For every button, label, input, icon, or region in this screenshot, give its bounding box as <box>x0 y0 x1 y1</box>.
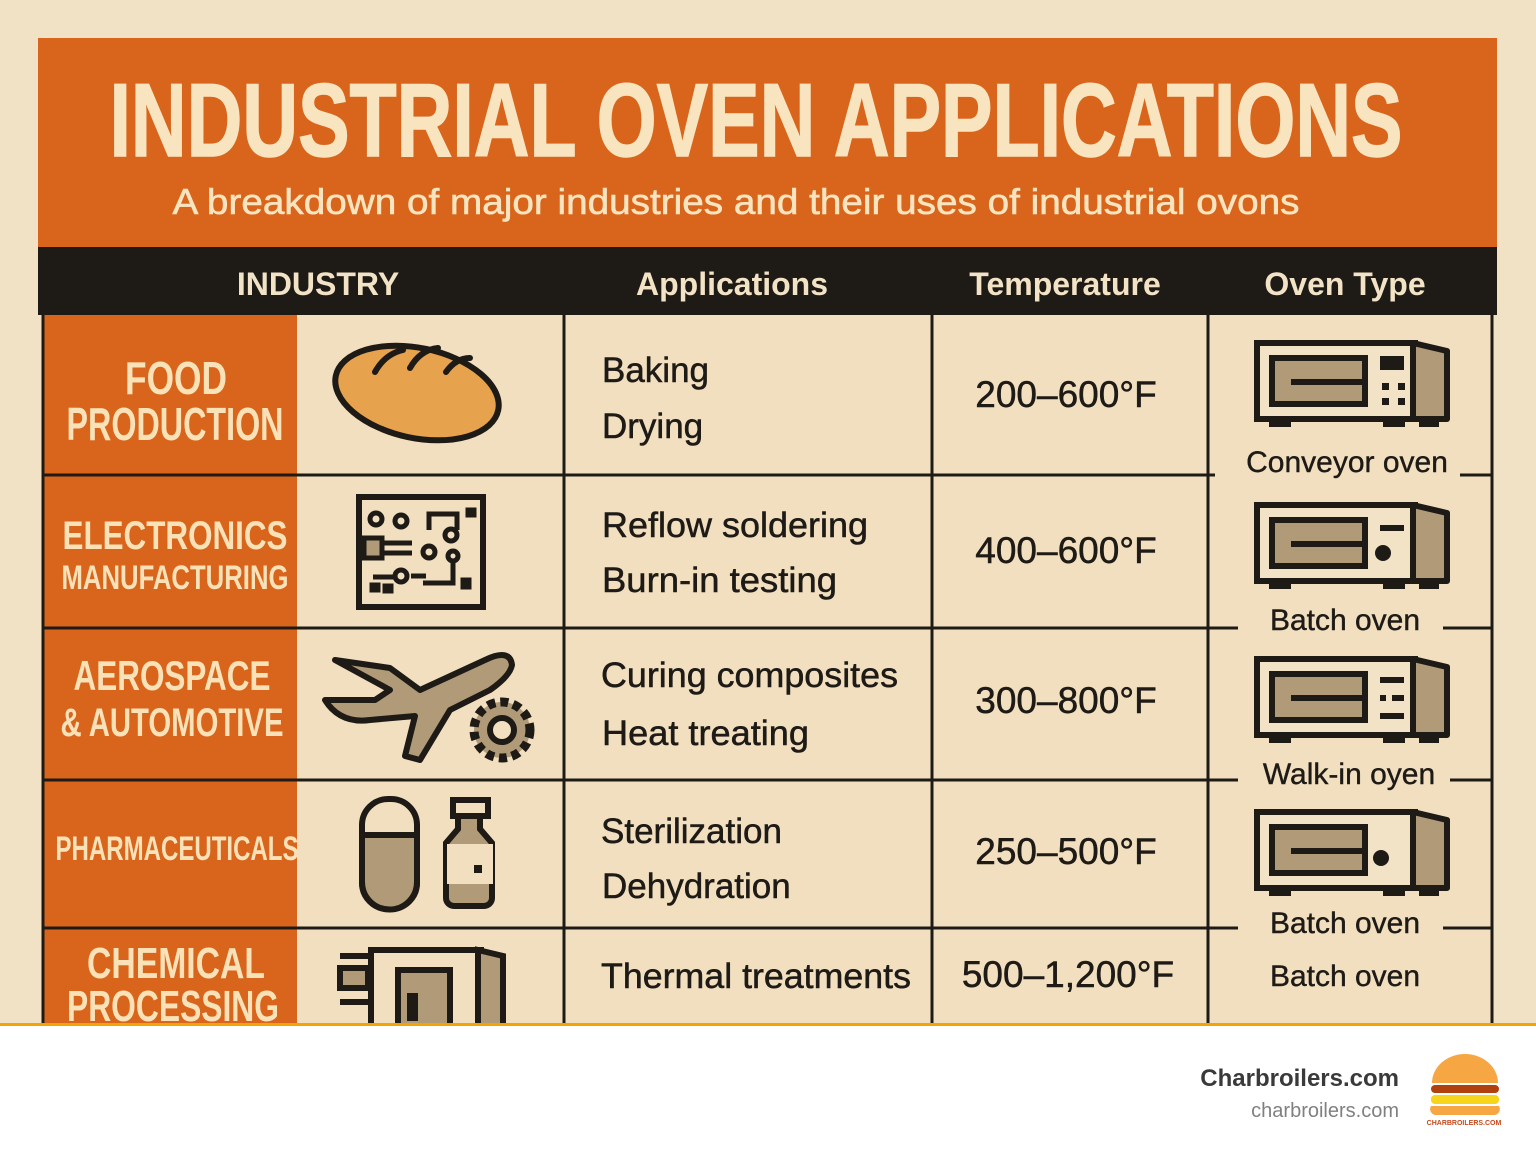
applications text: Dehydration <box>602 867 791 906</box>
row label: food production <box>66 352 284 450</box>
icon: batch oven <box>1257 505 1447 589</box>
oven type labels: Batch oven <box>1270 960 1420 993</box>
oven type labels: Conveyor oven <box>1246 446 1448 479</box>
applications text <box>601 351 911 996</box>
table header row: Oven Type <box>1264 266 1426 302</box>
applications text: Thermal treatments <box>601 957 911 996</box>
temperature text: 500–1,200°F <box>962 954 1174 995</box>
row label: chemical <box>67 939 279 1031</box>
table header row: Temperature <box>969 266 1161 302</box>
row label: electronics: MANUFACTURING <box>62 559 288 597</box>
icon: burger logo <box>1427 1054 1501 1127</box>
applications text: Curing composites <box>601 656 898 695</box>
temperature text: 400–600°F <box>975 530 1157 571</box>
applications text: Heat treating <box>602 714 809 753</box>
oven type labels: Batch oven <box>1270 907 1420 940</box>
icon: conveyor oven <box>1257 343 1447 427</box>
oven type labels: Batch oven <box>1270 604 1420 637</box>
icon: pill and bottle <box>362 799 493 910</box>
footer <box>0 1023 1536 1154</box>
icon: burger logo: CHARBROILERS.COM <box>1427 1120 1501 1127</box>
table header row: Applications <box>636 266 828 302</box>
applications text: Burn-in testing <box>602 561 837 600</box>
applications text: Reflow soldering <box>602 506 868 545</box>
row label: chemical: CHEMICAL <box>87 939 265 988</box>
icon: chemical furnace <box>340 950 503 1028</box>
temperature text: 250–500°F <box>975 831 1157 872</box>
temperature text: 300–800°F <box>975 680 1157 721</box>
row label: aerospace: AEROSPACE <box>74 652 270 699</box>
row label: food production: FOOD <box>125 352 227 404</box>
applications text: Baking <box>602 351 709 390</box>
icon: airplane and gear <box>325 655 530 760</box>
row label: chemical: PROCESSING <box>67 982 279 1031</box>
row label: aerospace: & AUTOMOTIVE <box>60 701 284 745</box>
table header row <box>38 247 1497 315</box>
temperature text <box>962 374 1174 995</box>
oven type labels <box>1246 446 1448 993</box>
header panel <box>38 38 1497 248</box>
icon: walk-in oven <box>1257 659 1447 743</box>
temperature text: 200–600°F <box>975 374 1157 415</box>
table header row: INDUSTRY <box>237 266 399 302</box>
row label: food production: PRODUCTION <box>66 398 284 450</box>
footer brand text: Charbroilers.com <box>1200 1065 1399 1092</box>
row label: electronics: ELECTRONICS <box>62 514 288 558</box>
oven type labels: Walk-in oyen <box>1263 758 1435 791</box>
icon: batch oven 2 <box>1257 812 1447 896</box>
icon: bread <box>326 332 508 454</box>
applications text: Drying <box>602 407 703 446</box>
footer: charbroilers.com <box>1251 1100 1399 1122</box>
row label: pharmaceuticals: PHARMACEUTICALS <box>56 830 298 868</box>
applications text: Sterilization <box>601 812 782 851</box>
icon: circuit board <box>359 497 483 607</box>
row label: electronics <box>62 514 288 597</box>
table body <box>42 315 1494 1027</box>
subtitle: A breakdown of major industries and their uses of industrial ovons <box>172 181 1300 222</box>
row label: aerospace <box>60 652 284 745</box>
